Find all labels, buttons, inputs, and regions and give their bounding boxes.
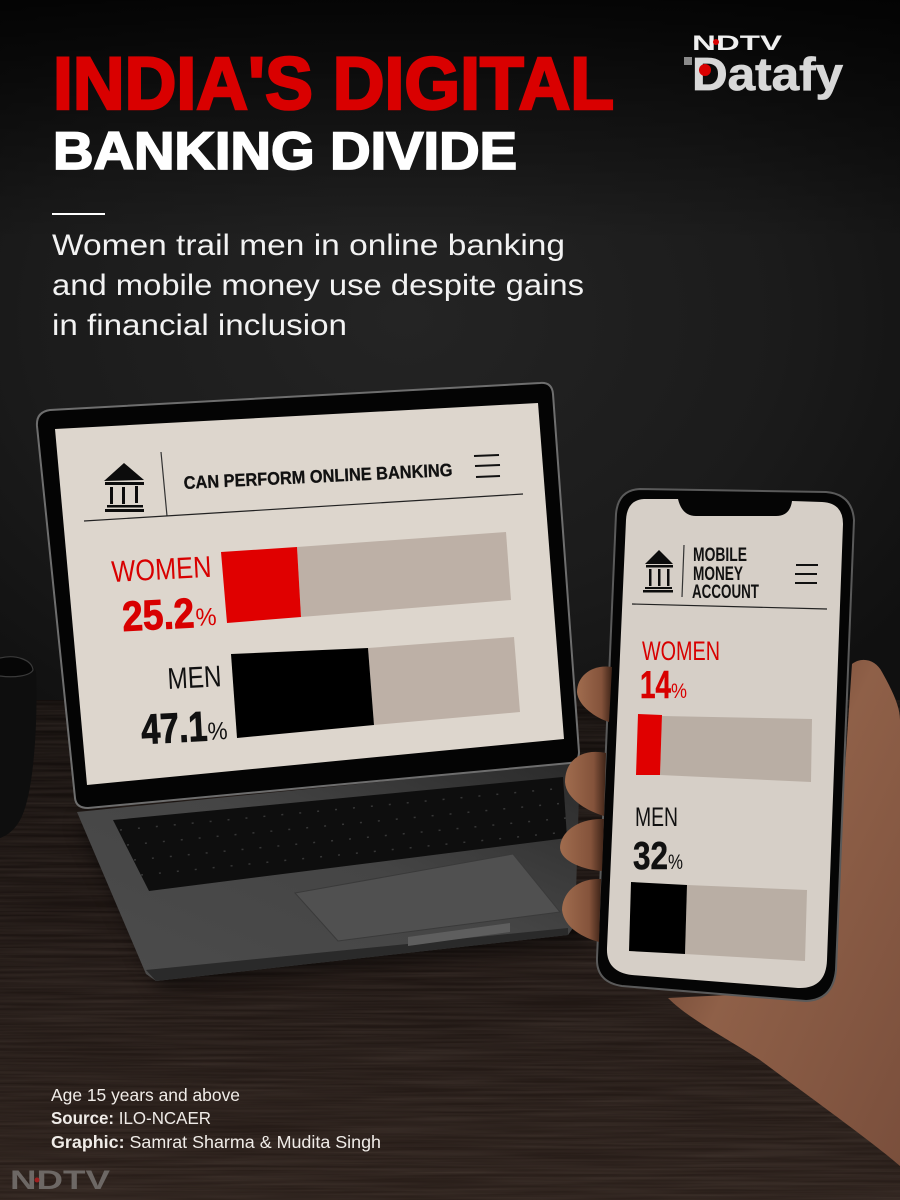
laptop men bar chart: 47.1 [140,703,208,753]
laptop screen [55,403,564,785]
hand fingers [560,667,612,942]
laptop lid and bezel [37,383,579,808]
title line 2: BANKING DIVIDE [53,122,517,181]
phone heading [692,545,759,603]
laptop base and keyboard deck [77,762,580,981]
phone screen [607,499,843,988]
laptop women bar chart: WOMEN [111,551,212,589]
laptop men bar chart: MEN [167,660,222,696]
logo: NDTV Datafy: NDTV [692,32,782,55]
laptop men bar chart [140,637,520,753]
phone [597,489,854,1001]
subtitle: in financial inclusion [52,309,347,342]
coffee mug [0,657,36,838]
laptop [37,383,590,985]
laptop men bar chart: % [207,717,228,746]
phone women bar chart: 14 [640,664,671,707]
logo: NDTV Datafy: Datafy [692,48,843,100]
subtitle: and mobile money use despite gains [52,269,584,302]
phone heading: ACCOUNT [692,582,759,603]
laptop shadow [80,820,590,985]
laptop heading: CAN PERFORM ONLINE BANKING [183,460,453,493]
laptop women bar chart: % [195,603,217,632]
phone women bar chart [636,636,812,782]
phone men bar chart [629,802,807,961]
laptop women bar chart [111,532,511,640]
title line 1: INDIA'S DIGITAL [53,42,614,125]
footer credits: Age 15 years and above [51,1085,240,1105]
phone men bar chart: 32 [633,835,668,878]
phone women bar chart: WOMEN [642,636,720,666]
icon: menu [795,565,818,583]
hand palm and thumb [668,660,900,1166]
phone heading: MOBILE [693,545,747,566]
subtitle: Women trail men in online banking [52,229,565,262]
background: wooden table [0,700,900,1200]
short rule under title [52,213,105,215]
footer credits [51,1085,381,1152]
phone heading: MONEY [693,564,743,585]
phone men bar chart: % [668,851,683,874]
footer credits: Graphic: Samrat Sharma & Mudita Singh [51,1132,381,1152]
icon: bank [643,550,673,592]
logo: NDTV Datafy [684,32,843,100]
background: dark wall [0,0,900,705]
phone men bar chart: MEN [635,802,678,832]
NDTV watermark: NDTV [10,1165,110,1195]
title [53,42,614,181]
footer credits: Source: ILO-NCAER [51,1108,211,1128]
icon: menu [474,455,500,477]
subtitle [52,229,584,342]
laptop screen header [84,452,523,521]
icon: bank [104,463,144,512]
laptop women bar chart: 25.2 [121,589,195,640]
phone women bar chart: % [671,680,687,703]
phone screen header [632,545,827,609]
phone body [597,489,854,1001]
